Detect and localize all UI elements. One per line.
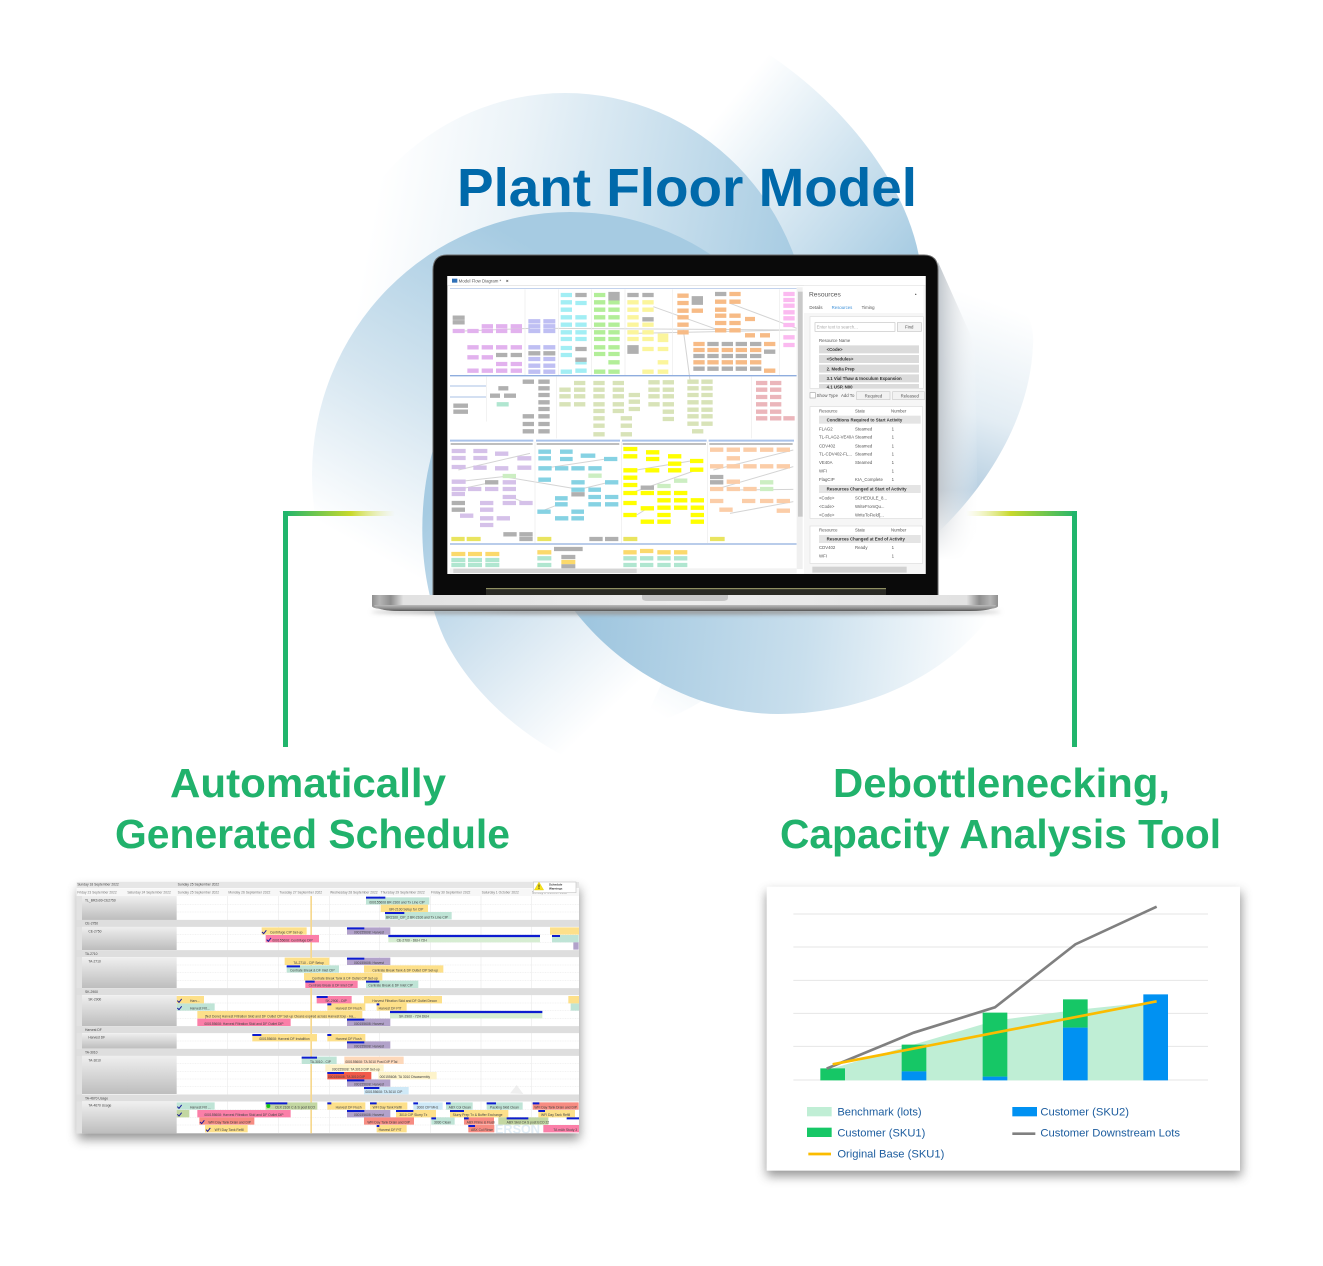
bar labels: 000155608: Harvest Filtration Skid and DF Outlet DIP	[204, 1113, 284, 1117]
bar labels: 000155608: TA 3010 DIP	[328, 1075, 366, 1079]
schedule bars	[177, 898, 579, 1132]
resource row labels: Harvest DF	[85, 1028, 102, 1032]
bar labels: WFI Day Tank Refill	[215, 1128, 244, 1132]
heading: debottlenecking capacity analysis tool	[780, 760, 1221, 857]
resource row labels: SK-2900	[88, 998, 101, 1002]
resource row labels: TA-4670 Usage	[85, 1096, 108, 1100]
heading: debottlenecking capacity analysis tool: Debottlenecking,	[833, 760, 1170, 806]
resources side panel: <Code>	[819, 495, 835, 500]
resources side panel: 1	[892, 477, 895, 482]
flow diagram connector lines	[458, 303, 797, 515]
diagram nodes: lilac block	[452, 451, 533, 525]
diagram nodes: blue block	[537, 452, 618, 518]
bar labels: Centrate Break & DF Inlet CIP	[368, 984, 414, 988]
schedule date header	[77, 882, 579, 896]
bar labels: Harvest DF Flush	[336, 1007, 362, 1011]
resources side panel: 1	[892, 460, 895, 465]
schedule warnings badge: Schedule	[549, 882, 563, 886]
resources side panel: WFI	[819, 469, 827, 474]
resources side panel: 1	[892, 554, 895, 559]
resources side panel	[804, 286, 926, 574]
resources side panel: WriteToField[...	[855, 512, 884, 517]
resources side panel: Resource Name	[819, 338, 851, 343]
resources side panel: 4.1 USP, N00	[827, 384, 853, 389]
bar labels: ABX Skid CA S post ECO 22	[507, 1120, 549, 1124]
resources side panel: Resources	[809, 291, 841, 298]
heading: debottlenecking capacity analysis tool: Capacity Analysis Tool	[780, 811, 1221, 857]
bar labels: Harv...	[190, 999, 200, 1003]
bar labels: 000155608: Harvest	[354, 1045, 384, 1049]
resources side panel: <Code>	[819, 504, 835, 509]
bar labels: 3030 Clean	[434, 1120, 451, 1124]
resource row labels: CE-2750	[88, 929, 102, 933]
resources side panel: CDV402	[819, 443, 836, 448]
bar labels: Harvest DF PIT	[379, 1007, 402, 1011]
bar labels: Harvest DF Flush	[336, 1105, 362, 1109]
resources side panel: FlagCIP	[819, 477, 835, 482]
resources side panel: Number	[891, 408, 907, 413]
bar labels: WFI Day Tank Refill	[373, 1105, 402, 1109]
resource row labels: TA-2710	[85, 952, 98, 956]
resource row labels: CE-2750	[85, 922, 98, 926]
bar status checks	[177, 930, 271, 1131]
resources side panel: KIA_Complete	[855, 477, 883, 482]
diagram nodes: pale yellow process	[627, 302, 668, 372]
resources side panel: Steamed	[855, 426, 873, 431]
screen tab bar: ×	[506, 278, 509, 283]
bar labels: BR-2100 Setup for CIP	[389, 908, 424, 912]
schedule date header: Monday 26 September 2022	[228, 890, 270, 894]
bar labels: Centrate Break Tank & DF Outlet CIP Set-up	[312, 976, 378, 980]
diagram nodes: purple process	[453, 326, 522, 371]
bar labels: 000155608: Harvest	[354, 1113, 384, 1117]
bar labels: Harvest DF Flush	[336, 1037, 362, 1041]
bar labels: Harvest Filt...	[190, 1007, 210, 1011]
bar labels: Slurry Prep Tx & Buffer Exchange	[453, 1113, 503, 1117]
bar labels: 000155608: Harvest Filtration Skid and DF Outlet DIP	[204, 1022, 284, 1026]
bar progress markers	[252, 898, 579, 1126]
resources side panel: 2. Media Prep	[827, 366, 855, 371]
resources side panel: <Code>	[819, 512, 835, 517]
chart legend: Customer Downstream Lots	[1040, 1128, 1181, 1140]
diagram nodes: bright yellow block	[623, 449, 704, 522]
diagram nodes: peach block	[710, 450, 790, 511]
bar labels: Packing Skid Clean	[490, 1105, 519, 1109]
resources side panel: 1	[892, 426, 895, 431]
resources side panel: Resource	[819, 408, 838, 413]
resource row labels: TL_BR2x00-CE2750	[85, 899, 116, 903]
resources side panel: State	[855, 408, 866, 413]
resources side panel: Find	[905, 325, 914, 330]
bar labels: CE-2700 - DEH 72H	[397, 938, 427, 942]
diagram nodes: orange process	[677, 294, 775, 371]
diagram nodes: green process	[594, 295, 620, 372]
resources side panel: State	[855, 528, 866, 533]
diagram nodes: olive utilities	[559, 382, 713, 434]
resources side panel: 1	[892, 452, 895, 457]
resources side panel: Resources Changed at Start of Activity	[827, 487, 907, 492]
panel: capacity analysis chart	[767, 887, 1241, 1176]
resources side panel: FLAG2	[819, 426, 833, 431]
diagram nodes: lavender process	[528, 321, 555, 372]
resources side panel: WFI	[819, 554, 827, 559]
schedule warnings badge: Warnings	[549, 886, 563, 890]
bar labels: 000155608: TA 3010 Post DIP PTal	[345, 1060, 398, 1064]
laptop hinge	[486, 588, 886, 595]
resources side panel: Add To	[841, 393, 855, 398]
diagram nodes: cyan process	[561, 295, 587, 372]
diagram nodes: teal and light green	[451, 404, 687, 565]
bar labels: 000155608: Harvest DF Installtion	[259, 1037, 310, 1041]
bar labels: 000155608: Harvest	[354, 961, 384, 965]
bar labels: ABX Col Rinse	[471, 1128, 493, 1132]
line: original base sku1	[833, 1001, 1157, 1064]
schedule date header: Thursday 29 September 2022	[381, 890, 425, 894]
bar labels: Harvest Filtration Skid and DF Outlet Decon	[372, 999, 437, 1003]
schedule date header: Wednesday 28 September 2022	[330, 890, 378, 894]
bar labels: ABX Col Clean	[449, 1105, 471, 1109]
resources side panel: Resource	[819, 528, 838, 533]
resources side panel: Resources	[832, 305, 852, 310]
resources side panel: 1	[892, 469, 895, 474]
schedule date header: Saturday 1 October 2022	[482, 890, 519, 894]
resources side panel: VE40A	[819, 460, 833, 465]
bar labels: 000155608: TA 3010 CIP	[365, 1090, 403, 1094]
resources side panel: Resources Changed at End of Activity	[827, 537, 905, 542]
bar labels: 000155608: TA 3010 DIP Set-up	[332, 1067, 380, 1071]
chart legend: Customer (SKU1)	[837, 1128, 925, 1140]
bar labels: WFI Day Tank Drain and DIP	[367, 1120, 411, 1124]
bar labels: Centrate Break & DF Inlet CIP	[309, 984, 354, 988]
resource row labels: TA-3010	[88, 1058, 101, 1062]
bar labels: 000155608 BR-2300 and Tx Line CIP	[369, 901, 426, 905]
connector: left arrow line	[283, 511, 395, 747]
bar labels: Centrate Break Tank & DF Outlet CIP Set-up	[372, 969, 438, 973]
resources side panel: Timing	[862, 305, 875, 310]
screen: model flow diagram application	[447, 276, 926, 574]
bar labels: TA-2710 - CIP Setup	[293, 961, 324, 965]
resource row labels: TA-2710	[88, 960, 101, 964]
background: flowing blue blobs	[312, 40, 1033, 778]
bar labels: [Not Done] Harvest Filtration Skid and DF Outlet CIP Set-up Cleans expired across Harvest Exp - Ha...	[205, 1014, 356, 1018]
bar labels: 000155608: Centrifuge DIP	[272, 938, 313, 942]
connector: right arrow line	[966, 511, 1077, 747]
resources side panel: 1	[892, 443, 895, 448]
screen tab bar	[447, 276, 926, 286]
diagram section dividers	[450, 288, 797, 290]
resources side panel: <Schedules>	[827, 357, 854, 362]
resources side panel: Steamed	[855, 452, 873, 457]
schedule date header: Sunday 25 September 2022	[178, 883, 219, 887]
resources side panel: Conditions Required to Start Activity	[827, 417, 903, 422]
bar labels: Harvest Filt ...	[190, 1105, 211, 1109]
diagram nodes: rose utilities	[756, 383, 795, 418]
bar labels: Centrate Break & DF Inlet CIP	[290, 969, 335, 973]
laptop bezel	[433, 255, 938, 596]
bar labels: WFI Day Tank Refill	[541, 1113, 570, 1117]
schedule date header: Friday 30 September 2022	[431, 890, 471, 894]
resource row labels: TA-4670 Usage	[88, 1104, 112, 1108]
resource row labels: Harvest DF	[88, 1036, 105, 1040]
resources side panel: Steamed	[855, 443, 873, 448]
bar labels: 3010 CIP Slurry Tx	[399, 1113, 428, 1117]
schedule date header: Saturday 24 September 2022	[127, 890, 171, 894]
heading: automatically generated schedule: Generated Schedule	[115, 811, 510, 857]
schedule date header: Tuesday 27 September 2022	[279, 890, 322, 894]
laptop base	[371, 595, 1001, 614]
heading: automatically generated schedule	[115, 760, 510, 857]
chart legend: Original Base (SKU1)	[837, 1148, 944, 1160]
bar labels: 000155608: Harvest	[354, 931, 384, 935]
resources side panel: Show Type	[817, 393, 839, 398]
heading: automatically generated schedule: Automatically	[170, 760, 446, 806]
schedule date header: Sunday 25 September 2022	[178, 890, 219, 894]
resources side panel: Enter text to search...	[817, 325, 858, 330]
chart legend: Customer (SKU2)	[1040, 1106, 1129, 1118]
resources side panel: Steamed	[855, 460, 873, 465]
bar labels	[190, 901, 578, 1132]
line: customer downstream lots	[827, 907, 1157, 1069]
schedule date header: Sunday 2 October 2022	[532, 890, 567, 894]
watermark fragment: ERSON	[495, 1122, 540, 1136]
resources side panel: SCHEDULE_8...	[855, 495, 887, 500]
resources side panel: CDV402	[819, 545, 836, 550]
bar labels: 000155608: Harvest	[354, 1082, 384, 1086]
resources side panel: 1	[892, 435, 895, 440]
schedule date header: Friday 23 September 2022	[77, 890, 117, 894]
schedule warnings badge	[533, 882, 576, 893]
diagram nodes: pink process	[783, 294, 795, 345]
laptop	[371, 255, 1001, 614]
bar labels: WFI Day Tank Drain and DIP	[534, 1105, 578, 1109]
bar labels: CEX 2100 C & S post ECO	[275, 1105, 316, 1109]
bar labels: 000155608: Harvest	[354, 1022, 384, 1026]
title: Plant Floor Model	[457, 158, 917, 218]
chart grid lines	[793, 914, 1208, 1080]
bar labels: 000155608: TA 3010 Disassembly	[380, 1075, 430, 1079]
bars: customer sku1 and sku2	[820, 994, 1168, 1080]
resources side panel: Required	[865, 393, 883, 398]
bar labels: BR2100_CIP_2 BR-2100 and Tx Line CIP	[386, 916, 449, 920]
resources side panel: WriteFromQu...	[855, 504, 884, 509]
bar labels: SK-2900 - DIP	[325, 999, 348, 1003]
resources side panel: Details	[809, 305, 823, 310]
resource row labels	[77, 896, 579, 1133]
screen tab bar: Model Flow Diagram *	[459, 278, 502, 283]
diagram scrollbars	[450, 287, 803, 573]
bar labels: ABX Prime & Flush	[467, 1120, 495, 1124]
watermark fragment	[495, 1085, 540, 1136]
diagram nodes: gold footers	[451, 532, 725, 545]
diagram nodes: grey resources	[452, 294, 775, 566]
bar labels: TA mAb Study 3	[553, 1128, 577, 1132]
schedule date header: Sunday 18 September 2022	[77, 883, 119, 887]
bar labels: SK-2900 - 72H DEH	[399, 1014, 430, 1018]
chart legend: Benchmark (lots)	[837, 1106, 922, 1118]
resources side panel: <Code>	[827, 347, 843, 352]
resources side panel: Ready	[855, 545, 868, 550]
bar labels: 3000 CIP MHz	[417, 1105, 439, 1109]
resources side panel: Number	[891, 528, 907, 533]
resources side panel: TL-CDV402-FL...	[819, 452, 852, 457]
resources side panel: Steamed	[855, 435, 873, 440]
resource row labels: TA-3010	[85, 1051, 98, 1055]
area: benchmark lots	[833, 1002, 1156, 1080]
chart legend	[807, 1106, 1181, 1160]
resources side panel: •	[915, 292, 917, 297]
resource row labels: SK-2900	[85, 990, 98, 994]
resources side panel: TL-FLAG2-VE40A	[819, 435, 854, 440]
resources side panel: Released	[901, 393, 920, 398]
resources side panel: 1	[892, 545, 895, 550]
bar labels: Centrifuge CIP Set-up	[270, 931, 303, 935]
bar labels: Harvest DF PIT	[379, 1128, 402, 1132]
resources side panel: 3.1 Vial Thaw & Inoculum Expansion	[827, 376, 902, 381]
bar labels: WFI Day Tank Drain and DIP	[208, 1120, 252, 1124]
bar labels: TA-3010 - CIP	[310, 1060, 332, 1064]
schedule grid lines	[227, 896, 532, 1133]
schedule warnings badge: !	[538, 885, 540, 891]
panel: schedule gantt chart	[77, 882, 580, 1139]
current time marker	[310, 896, 312, 1133]
